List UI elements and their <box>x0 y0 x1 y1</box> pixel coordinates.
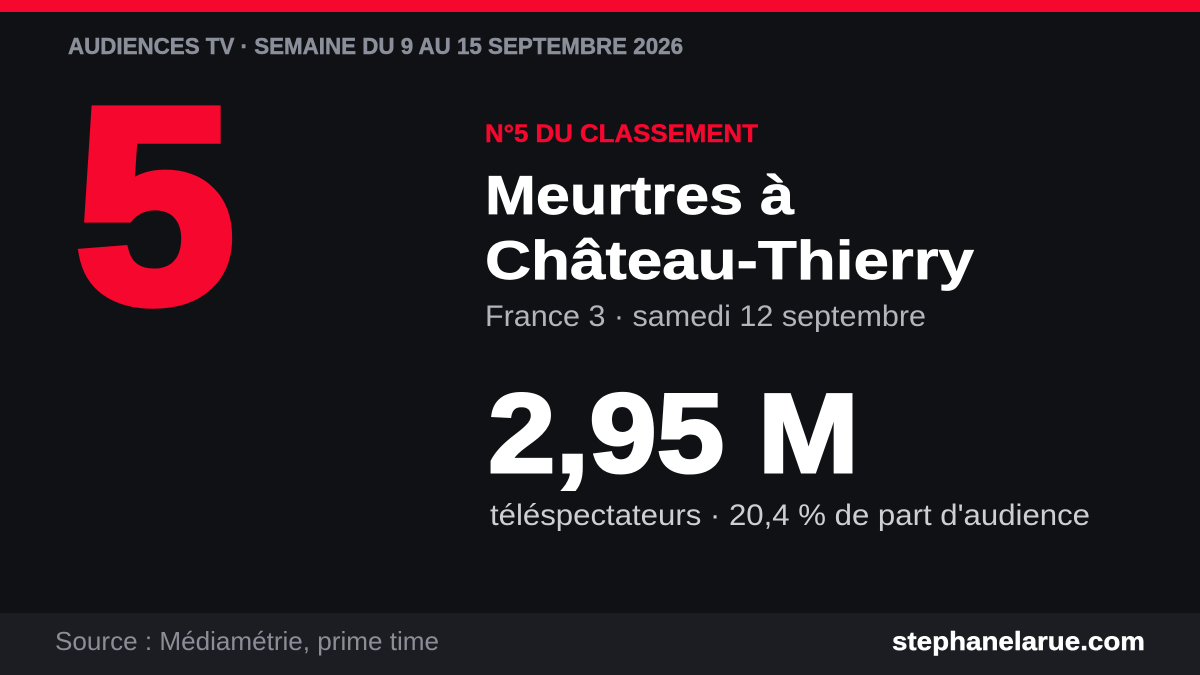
rank label: N°5 DU CLASSEMENT <box>485 120 758 148</box>
website: stephanelarue.com <box>892 626 1145 656</box>
programme title <box>485 164 974 291</box>
programme title: Château-Thierry <box>485 229 974 291</box>
footer band <box>0 613 1200 675</box>
audience figure: 2,95 M <box>488 371 859 496</box>
programme title: Meurtres à <box>485 164 794 226</box>
audience detail: téléspectateurs · 20,4 % de part d'audience <box>490 499 1090 532</box>
top red bar <box>0 0 1200 12</box>
channel and date: France 3 · samedi 12 septembre <box>485 300 926 333</box>
header line: AUDIENCES TV · SEMAINE DU 9 AU 15 SEPTEMBRE 2026 <box>68 33 683 59</box>
source: Source : Médiamétrie, prime time <box>55 626 439 656</box>
rank number: 5 <box>75 50 235 360</box>
